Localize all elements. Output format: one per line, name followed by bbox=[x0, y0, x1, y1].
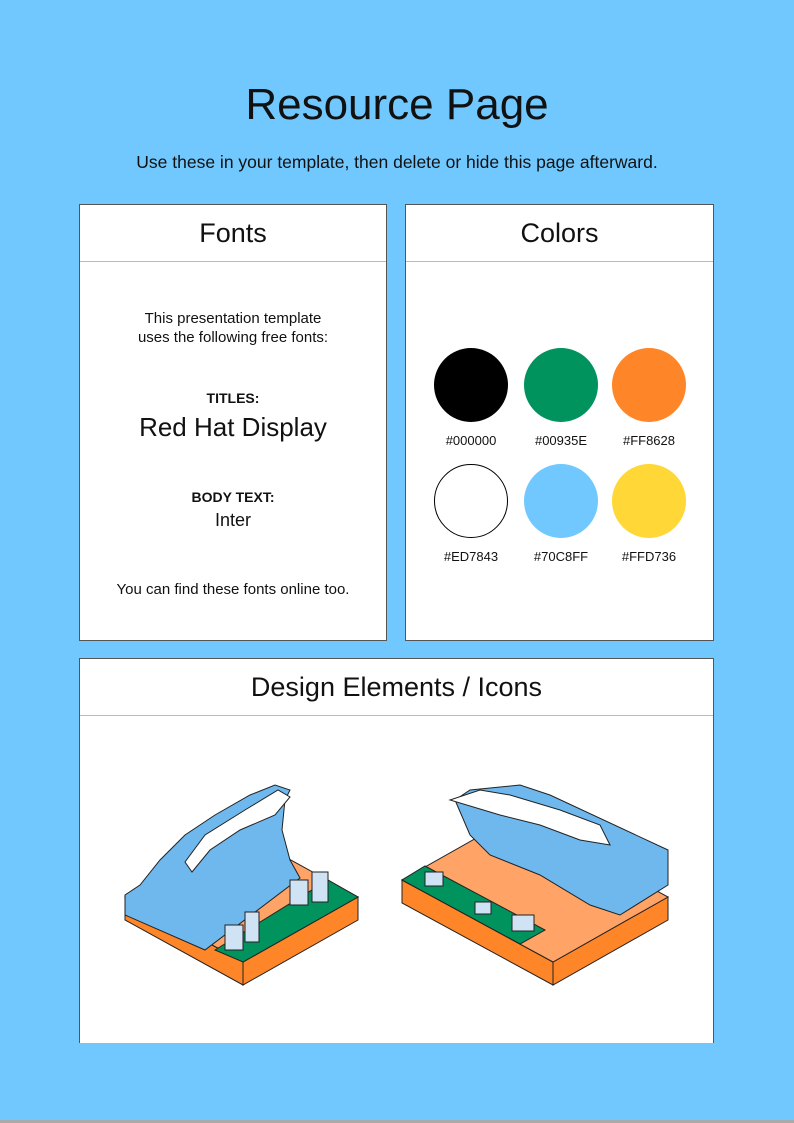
text: intro: uses the following free fonts: bbox=[138, 329, 328, 346]
panel: colors bbox=[405, 204, 714, 641]
subtitle: Use these in your template, then delete or hide this page afterward. bbox=[136, 152, 658, 172]
labels: #000000 bbox=[446, 433, 496, 448]
labels: #00935E bbox=[535, 433, 587, 448]
heading: design elements: Design Elements / Icons bbox=[251, 672, 542, 702]
labels: #FF8628 bbox=[623, 433, 675, 448]
labels: #70C8FF bbox=[534, 549, 588, 564]
heading: fonts: Fonts bbox=[199, 218, 267, 248]
labels bbox=[444, 433, 676, 564]
text: intro: This presentation template bbox=[145, 310, 321, 327]
text: footer: You can find these fonts online too. bbox=[117, 581, 349, 598]
swatch: black bbox=[434, 348, 508, 422]
labels: #FFD736 bbox=[622, 549, 676, 564]
title: Resource Page bbox=[245, 80, 549, 129]
swatch: yellow bbox=[612, 464, 686, 538]
heading: colors: Colors bbox=[520, 218, 599, 248]
text: body font bbox=[192, 489, 274, 530]
heading: colors bbox=[406, 205, 713, 262]
heading: fonts bbox=[80, 205, 386, 262]
illustration: tsunami beach bbox=[401, 784, 669, 986]
swatch: white bbox=[434, 464, 508, 538]
panel: fonts bbox=[79, 204, 387, 641]
text: titles font: TITLES: bbox=[207, 390, 259, 406]
text: titles font: Red Hat Display bbox=[139, 412, 327, 442]
panel: design elements bbox=[79, 658, 714, 1043]
text: body font: BODY TEXT: bbox=[192, 489, 274, 505]
labels: #ED7843 bbox=[444, 549, 498, 564]
swatch: orange bbox=[612, 348, 686, 422]
text: intro bbox=[138, 310, 328, 346]
text: body font: Inter bbox=[215, 510, 251, 530]
text: titles font bbox=[139, 390, 327, 442]
heading: design elements bbox=[80, 659, 713, 716]
swatch: green bbox=[524, 348, 598, 422]
swatch: blue bbox=[524, 464, 598, 538]
illustration: tsunami city bbox=[124, 784, 359, 986]
